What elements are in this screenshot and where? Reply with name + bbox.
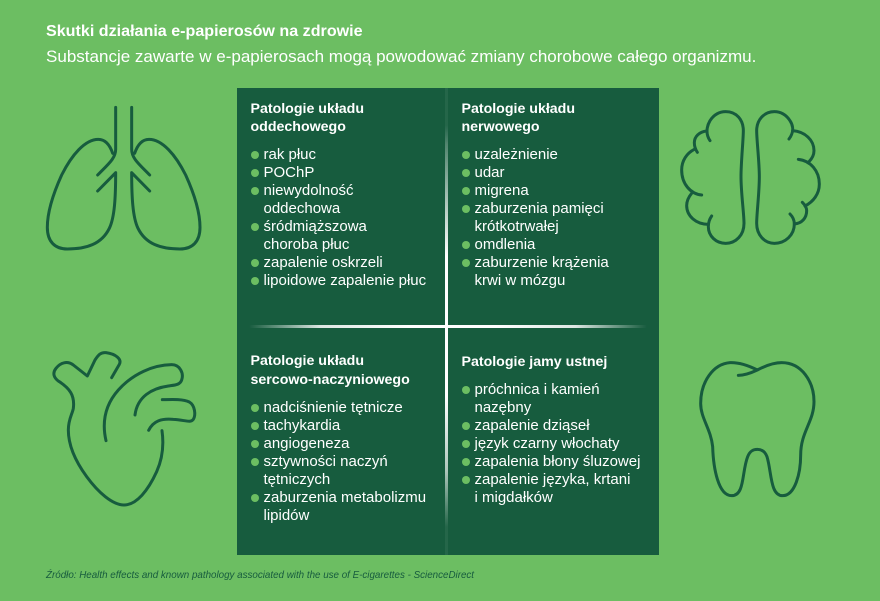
heading: jama ustna: Patologie jamy ustnej [462,354,607,370]
list: układ nerwowy [462,146,609,289]
list: układ nerwowy: udar [474,164,505,181]
vertical divider [445,88,448,555]
source note: Źródło: Health effects and known pathology associated with the use of E-cigarettes - ScienceDirect [46,570,474,581]
heading: układ oddechowy [250,101,364,135]
list: układ sercowo-naczyniowy: lipidów [264,507,309,524]
list: układ nerwowy: uzależnienie [474,146,558,163]
list: układ oddechowy: niewydolność [264,182,354,199]
subtitle: Substancje zawarte w e-papierosach mogą powodować zmiany chorobowe całego organizmu. [46,47,756,66]
list: układ sercowo-naczyniowy: sztywności naczyń [264,453,388,470]
list: jama ustna: próchnica i kamień [474,381,600,398]
list: układ sercowo-naczyniowy [251,399,426,524]
list: jama ustna: zapalenia błony śluzowej [474,453,640,470]
heading: układ nerwowy [462,101,575,135]
heading: układ nerwowy: Patologie układu [462,101,575,117]
heading: układ sercowo-naczyniowy: Patologie układu [250,353,364,369]
icon: brain [682,112,819,243]
list: jama ustna [462,381,640,506]
list: układ oddechowy: choroba płuc [264,236,349,253]
icon: lungs [47,107,200,249]
heading: układ nerwowy: nerwowego [462,119,540,135]
horizontal divider [248,325,646,328]
list: układ oddechowy: POChP [264,164,314,181]
list: jama ustna: język czarny włochaty [474,435,620,452]
list: układ sercowo-naczyniowy: angiogeneza [264,435,349,452]
icon: heart [54,353,195,505]
list: jama ustna: zapalenie języka, krtani [474,471,630,488]
list: układ oddechowy: śródmiąższowa [264,218,367,235]
list: układ nerwowy: omdlenia [474,236,535,253]
list: układ oddechowy: zapalenie oskrzeli [264,254,383,271]
list: układ sercowo-naczyniowy: tętniczych [264,471,330,488]
heading: układ oddechowy: Patologie układu [250,101,364,117]
heading: układ sercowo-naczyniowy: sercowo-naczyniowego [250,372,410,388]
list: układ sercowo-naczyniowy: nadciśnienie tętnicze [264,399,403,416]
list: układ oddechowy: oddechowa [264,200,340,217]
heading: układ sercowo-naczyniowy [250,353,410,388]
title: Skutki działania e-papierosów na zdrowie [46,22,363,40]
list: układ nerwowy: krwi w mózgu [474,272,565,289]
panel: four pathology quadrants [236,88,658,555]
list: jama ustna: nazębny [474,399,531,416]
list: układ nerwowy: krótkotrwałej [474,218,559,235]
list: układ sercowo-naczyniowy: zaburzenia metabolizmu [264,489,426,506]
list: układ oddechowy: rak płuc [264,146,316,163]
list: układ nerwowy: zaburzenie krążenia [474,254,609,271]
list: układ oddechowy [251,146,426,289]
list: układ sercowo-naczyniowy: tachykardia [264,417,340,434]
list: jama ustna: i migdałków [474,489,553,506]
list: układ nerwowy: zaburzenia pamięci [474,200,604,217]
list: jama ustna: zapalenie dziąseł [474,417,590,434]
list: układ nerwowy: migrena [474,182,529,199]
icon: tooth [701,363,814,496]
list: układ oddechowy: lipoidowe zapalenie płuc [264,272,426,289]
heading: układ oddechowy: oddechowego [250,119,346,135]
